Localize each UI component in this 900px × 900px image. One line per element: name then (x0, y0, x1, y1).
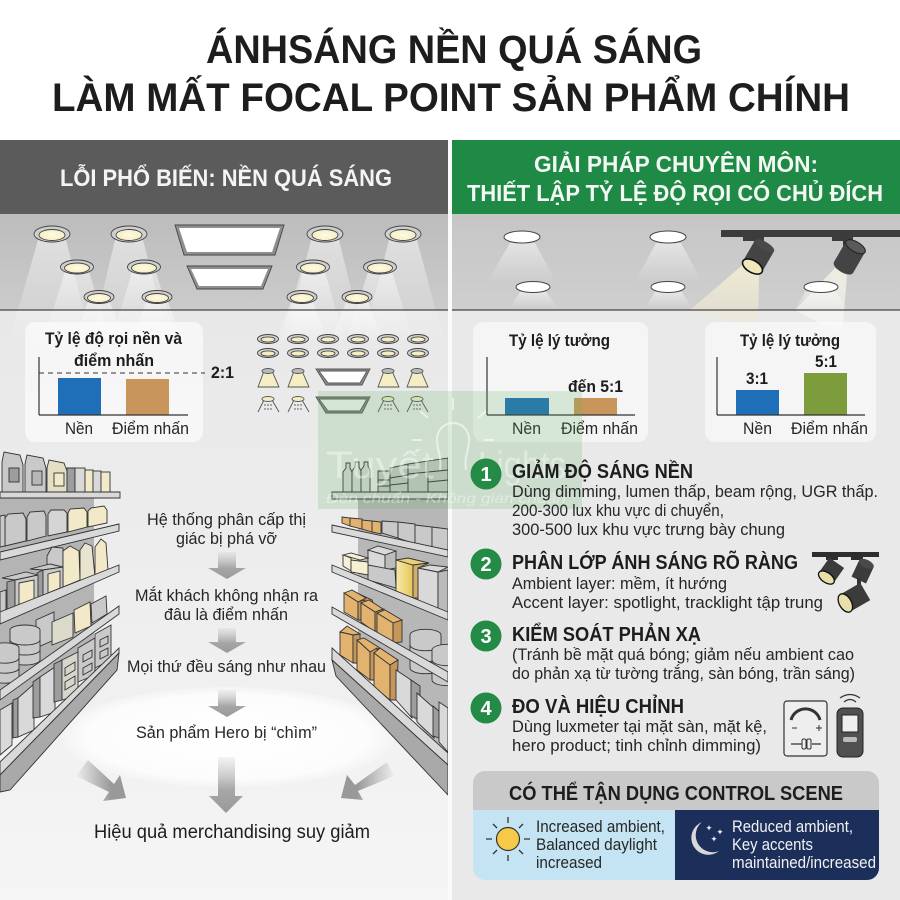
watermark: Lights (478, 445, 566, 487)
chart card: illuminance ratio 2:1 (25, 322, 234, 442)
step 2: clear light layers: Accent layer: spotlight, tracklight tập trung (512, 594, 823, 612)
step 4: measure and calibrate (470, 692, 767, 755)
chart card: illuminance ratio 2:1: Tỷ lệ độ rọi nền và (45, 329, 182, 348)
shelf 3 (332, 565, 448, 620)
header: common mistake: LỖI PHỔ BIẾN: NỀN QUÁ SÁNG (60, 163, 392, 192)
conclusion text: Hiệu quả merchandising suy giảm (94, 822, 370, 843)
title: LÀM MẤT FOCAL POINT SẢN PHẨM CHÍNH (52, 73, 850, 120)
chart card: ideal ratio 3:1 and 5:1 (705, 322, 876, 442)
shelf 4 (332, 607, 448, 682)
step 3: control reflection: 3 (480, 626, 492, 648)
chart card: ideal ratio 3:1 and 5:1: Nền (743, 420, 772, 438)
chart card: illuminance ratio 2:1: điểm nhấn (74, 351, 154, 370)
title: ÁNHSÁNG NỀN QUÁ SÁNG (206, 26, 702, 72)
small fixtures diagram (258, 334, 428, 413)
day scene: increased (536, 854, 602, 872)
step 1: reduce background brightness: 300-500 lux khu vực trưng bày chung (512, 521, 785, 539)
step 1: reduce background brightness: Dùng dimming, lumen thấp, beam rộng, UGR thấp. (512, 483, 878, 501)
step 2: clear light layers: 2 (480, 554, 492, 576)
row 5 products (340, 626, 448, 752)
shelf 3 (0, 565, 119, 624)
header: solution: THIẾT LẬP TỶ LỆ ĐỘ RỌI CÓ CHỦ ĐÍCH (467, 178, 883, 206)
shelf 2 (332, 525, 448, 557)
ceiling with controlled lights (452, 214, 900, 335)
row 2 products (0, 506, 107, 547)
shelf 4 (0, 606, 119, 700)
day scene: Increased ambient, (536, 818, 665, 836)
step 1: reduce background brightness: 1 (480, 464, 492, 486)
centre divider (448, 140, 452, 900)
step 1: reduce background brightness: GIẢM ĐỘ SÁNG NỀN (512, 459, 693, 483)
night scene: Reduced ambient, (732, 818, 853, 836)
arrow 3 (208, 690, 246, 717)
step 1: reduce background brightness (470, 458, 878, 539)
base shelf (0, 648, 119, 775)
step 4: measure and calibrate: ĐO VÀ HIỆU CHỈNH (512, 694, 684, 718)
chart card: ideal ratio up to 5:1: đến 5:1 (568, 377, 623, 396)
chart card: ideal ratio 3:1 and 5:1: Điểm nhấn (791, 420, 868, 438)
arrow right (341, 762, 394, 800)
step 2: clear light layers (470, 548, 823, 612)
arrow left (76, 760, 126, 801)
arrow center (209, 757, 243, 813)
step 4: measure and calibrate: hero product; tinh chỉnh dimming) (512, 737, 761, 755)
control scene box (473, 771, 879, 880)
day scene: Balanced daylight (536, 836, 657, 854)
row 4 products (0, 596, 107, 683)
step 1: reduce background brightness: 200-300 lux khu vực di chuyển, (512, 502, 724, 520)
step 2: clear light layers: PHÂN LỚP ÁNH SÁNG RÕ RÀNG (512, 550, 798, 574)
watermark: Tuyết (326, 445, 434, 487)
chart card: illuminance ratio 2:1: Nền (65, 420, 93, 438)
flow text: eye cannot see accent: đâu là điểm nhấn (164, 606, 288, 624)
watermark: Đèn chuẩn - Không gian chuẩn (326, 490, 566, 506)
header: solution (452, 140, 900, 214)
flow text: hero sunk: Sản phẩm Hero bị “chìm” (136, 724, 317, 742)
night scene: maintained/increased (732, 854, 876, 872)
header: solution: GIẢI PHÁP CHUYÊN MÔN: (534, 149, 818, 177)
step 4: measure and calibrate: Dùng luxmeter tại mặt sàn, mặt kệ, (512, 718, 767, 736)
panel: professional solution (452, 140, 900, 900)
panel: common mistake (0, 140, 463, 900)
chart card: ideal ratio 3:1 and 5:1: 5:1 (815, 352, 837, 371)
chart card: ideal ratio up to 5:1 (473, 322, 648, 442)
ceiling with many bright downlights (0, 214, 448, 345)
step 3: control reflection: (Tránh bề mặt quá bóng; giảm nếu ambient cao (512, 646, 854, 664)
title (52, 26, 850, 120)
row 3 products (343, 546, 448, 612)
row 1 products (343, 458, 448, 492)
flow text: eye cannot see accent: Mắt khách không nhận ra (135, 586, 319, 605)
chart card: ideal ratio up to 5:1: Điểm nhấn (561, 420, 638, 438)
chart card: ideal ratio 3:1 and 5:1: Tỷ lệ lý tưởng (740, 331, 840, 350)
control scene box: CÓ THỂ TẬN DỤNG CONTROL SCENE (509, 781, 843, 805)
day scene (473, 810, 675, 880)
step 4: measure and calibrate: 4 (480, 698, 492, 720)
shelf 2 (0, 524, 119, 560)
row 5 products (0, 625, 111, 755)
chart card: ideal ratio up to 5:1: Tỷ lệ lý tưởng (509, 331, 610, 350)
step 3: control reflection: do phản xạ từ tường trắng, sàn bóng, trần sáng) (512, 664, 855, 683)
row 2 products (342, 517, 448, 553)
icon: dimmer control (784, 701, 827, 756)
arrow 2 (208, 628, 246, 653)
track light rail with two spotlights (721, 230, 900, 277)
arrow 1 (208, 552, 246, 579)
floor glow: hero spotlight (62, 687, 394, 787)
chart card: ideal ratio 3:1 and 5:1: 3:1 (746, 369, 768, 388)
night scene (675, 810, 879, 880)
chart card: illuminance ratio 2:1: Điểm nhấn (112, 420, 189, 438)
night scene: Key accents (732, 836, 813, 854)
flow text: hierarchy broken: Hệ thống phân cấp thị (147, 511, 306, 529)
right shelving unit (332, 458, 463, 795)
base shelf (332, 648, 448, 765)
flow text: hierarchy broken (147, 511, 306, 548)
watermark (318, 391, 582, 509)
shelf 1 (0, 492, 120, 498)
icon: track lights (812, 552, 879, 615)
left shelving unit (0, 452, 120, 792)
flow text: everything equally bright: Mọi thứ đều sáng như nhau (127, 658, 326, 676)
chart card: ideal ratio up to 5:1: Nền (512, 420, 541, 438)
chart card: illuminance ratio 2:1: 2:1 (211, 363, 234, 382)
header: common mistake (0, 140, 448, 214)
shelf 1 (332, 492, 448, 499)
step 3: control reflection: KIỂM SOÁT PHẢN XẠ (512, 623, 701, 646)
flow text: eye cannot see accent (135, 586, 319, 624)
row 3 products (0, 539, 108, 618)
icon: lux meter (837, 694, 863, 757)
flow text: hierarchy broken: giác bị phá vỡ (176, 530, 277, 548)
step 2: clear light layers: Ambient layer: mềm, ít hướng (512, 575, 727, 593)
row 1 products (2, 452, 110, 492)
step 3: control reflection (470, 620, 855, 683)
row 4 products (344, 590, 463, 686)
